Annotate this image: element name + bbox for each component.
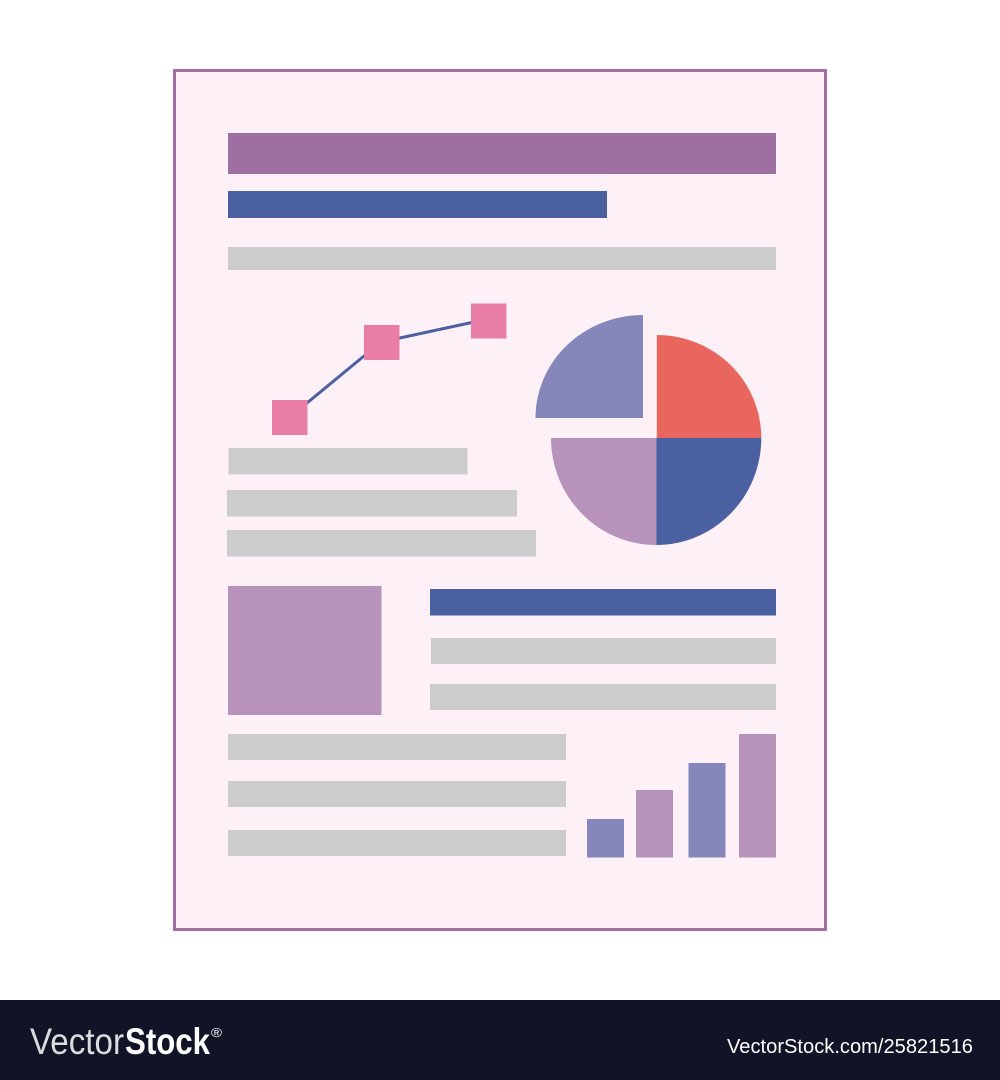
footer image id: VectorStock.com/25821516 <box>727 1036 973 1058</box>
footer band <box>0 1000 1000 1080</box>
panel: document page <box>174 70 826 930</box>
pie slice: upper right <box>657 335 761 438</box>
heading: subtitle bar <box>228 191 607 218</box>
footer logo <box>30 1021 222 1062</box>
text block: lines beside chart <box>227 448 536 556</box>
image placeholder <box>228 586 382 715</box>
chart: bar chart <box>587 734 776 858</box>
footer logo: ® <box>211 1025 222 1040</box>
pie slice: detached upper left <box>536 315 643 418</box>
heading: title bar <box>228 133 776 174</box>
pie slice: lower right <box>656 438 761 545</box>
heading: section bar <box>430 589 776 616</box>
text block: lower lines <box>228 734 566 856</box>
chart: line chart <box>272 304 506 435</box>
chart: pie chart <box>536 315 761 545</box>
footer logo: Stock <box>125 1021 210 1062</box>
footer logo: Vector <box>30 1021 124 1062</box>
text block: intro line <box>228 247 776 270</box>
text block: section lines <box>430 638 776 710</box>
pie slice: lower left <box>551 438 656 545</box>
